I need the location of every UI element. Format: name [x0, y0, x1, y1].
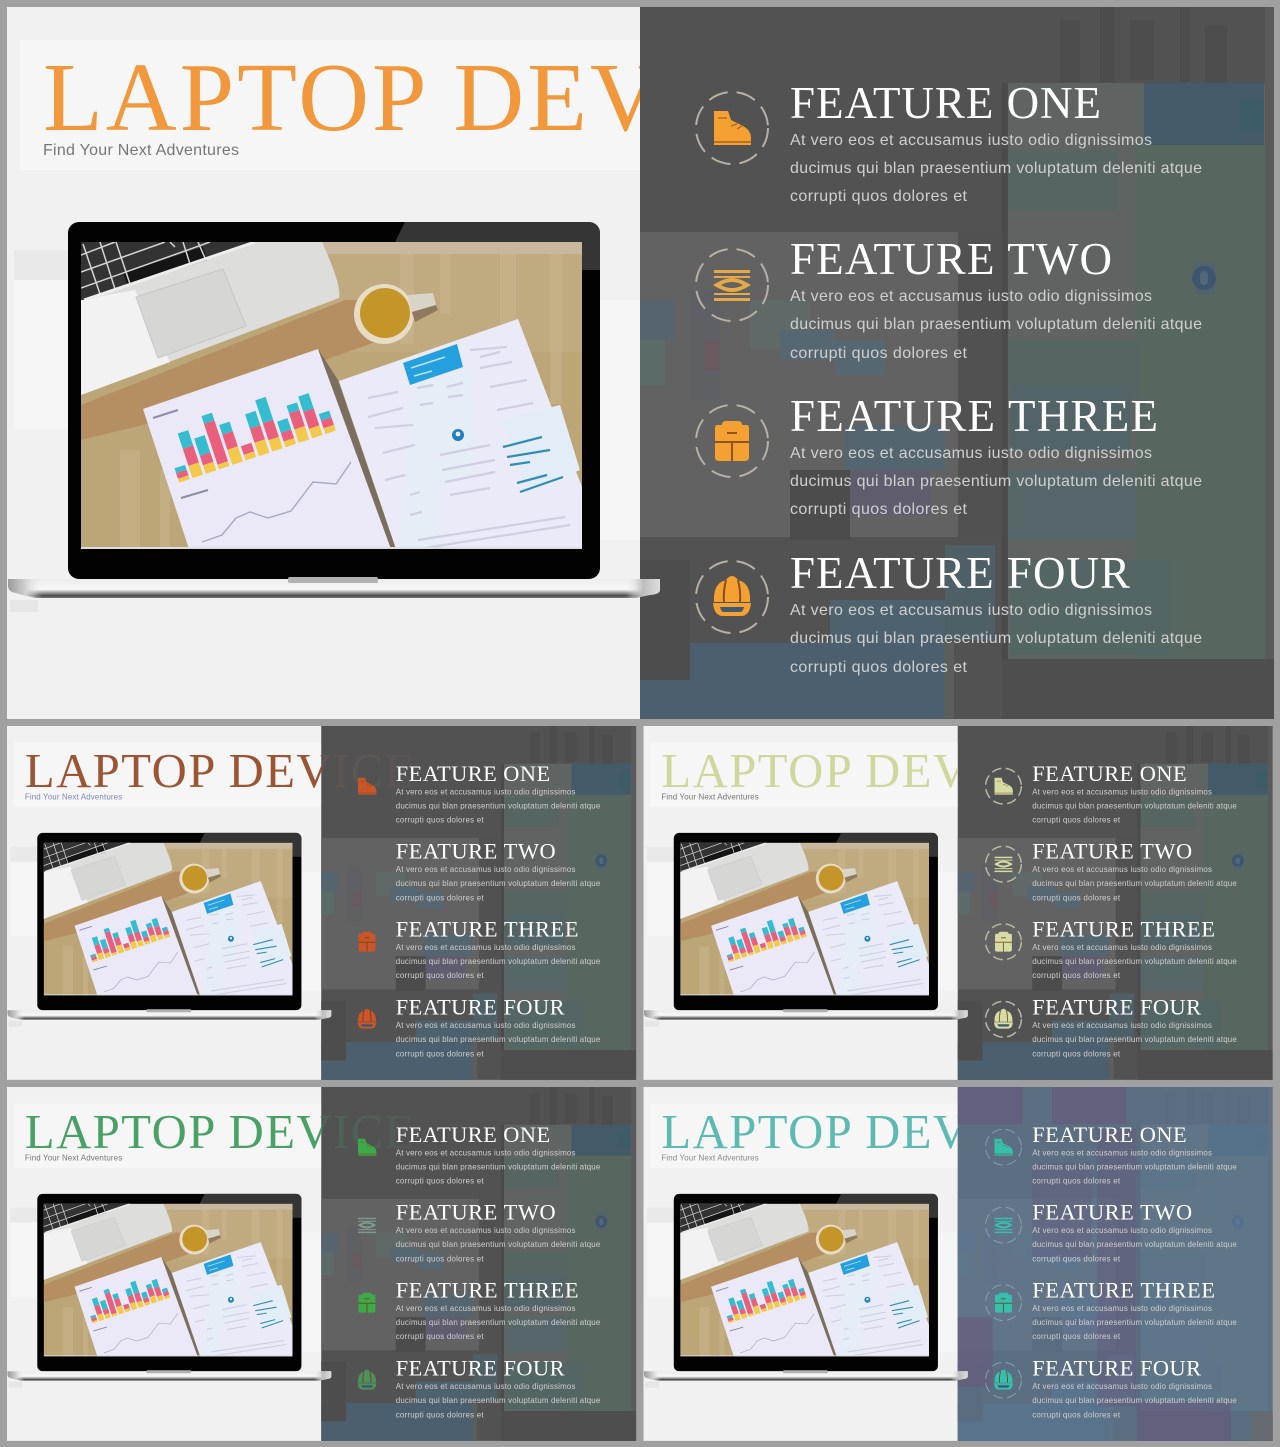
body text: At vero eos et accusamus iusto odio dignissimos [1032, 943, 1212, 952]
heading: FEATURE ONE [396, 761, 550, 786]
left background [644, 1087, 958, 1441]
body text [1032, 1382, 1237, 1420]
body text: corrupti quos dolores et [1032, 1050, 1121, 1059]
body text: ducimus qui blan praesentium voluptatum deleniti atque [1032, 801, 1237, 811]
body text: At vero eos et accusamus iusto odio dignissimos [1032, 1021, 1212, 1030]
body text: ducimus qui blan praesentium voluptatum deleniti atque [1032, 1162, 1237, 1172]
body text [396, 865, 601, 902]
body text: ducimus qui blan praesentium voluptatum deleniti atque [790, 630, 1202, 647]
icon: kayak [358, 1218, 376, 1233]
body text: At vero eos et accusamus iusto odio dignissimos [790, 288, 1152, 305]
body text: corrupti quos dolores et [396, 1332, 484, 1341]
body text: At vero eos et accusamus iusto odio dignissimos [1032, 1304, 1212, 1313]
title: LAPTOP DEVICE [25, 744, 416, 798]
feature one [358, 761, 601, 824]
feature two [986, 1200, 1237, 1263]
icon: boot [358, 778, 376, 795]
feature three [986, 1278, 1237, 1341]
body text: ducimus qui blan praesentium voluptatum deleniti atque [396, 1318, 601, 1327]
slide: teal variant [644, 1087, 1273, 1441]
body text [1032, 865, 1237, 902]
body text: corrupti quos dolores et [1032, 1176, 1121, 1185]
subtitle: Find Your Next Adventures [25, 1154, 122, 1163]
body text: corrupti quos dolores et [1032, 893, 1121, 902]
laptop mockup with desk photo [7, 1194, 331, 1381]
icon: helmet [358, 1370, 376, 1390]
body text: ducimus qui blan praesentium voluptatum deleniti atque [1032, 1035, 1237, 1044]
icon: kayak [986, 846, 1021, 882]
heading: FEATURE FOUR [1032, 1356, 1201, 1381]
body text: At vero eos et accusamus iusto odio dignissimos [396, 943, 576, 952]
feature three [359, 1278, 601, 1341]
heading: FEATURE THREE [396, 917, 578, 942]
laptop mockup with desk photo [644, 833, 968, 1020]
body text: corrupti quos dolores et [1032, 1332, 1121, 1341]
heading: FEATURE ONE [1032, 1122, 1187, 1147]
feature four [696, 548, 1202, 676]
icon: boot [696, 92, 768, 164]
body text: At vero eos et accusamus iusto odio dignissimos [1032, 788, 1212, 797]
body text: At vero eos et accusamus iusto odio dignissimos [1032, 865, 1212, 874]
body text: corrupti quos dolores et [790, 501, 968, 518]
left background [644, 726, 958, 1080]
heading: FEATURE TWO [396, 839, 556, 864]
left background [7, 7, 640, 719]
slide: lime variant [644, 726, 1273, 1080]
right dark photo panel [321, 1087, 636, 1441]
heading: FEATURE FOUR [396, 1356, 565, 1381]
body text [396, 1304, 601, 1341]
feature one [358, 1122, 601, 1185]
icon: backpack [696, 405, 768, 477]
heading: FEATURE FOUR [396, 995, 565, 1020]
body text: ducimus qui blan praesentium voluptatum deleniti atque [1032, 1396, 1237, 1405]
heading: FEATURE TWO [1032, 1200, 1192, 1225]
heading: FEATURE TWO [396, 1200, 556, 1225]
body text: At vero eos et accusamus iusto odio dignissimos [396, 1149, 576, 1158]
icon: helmet [986, 1001, 1021, 1037]
body text: corrupti quos dolores et [396, 1254, 484, 1263]
body text: At vero eos et accusamus iusto odio dignissimos [790, 132, 1152, 149]
body text: ducimus qui blan praesentium voluptatum deleniti atque [1032, 1318, 1237, 1327]
body text [396, 788, 601, 824]
laptop mockup with desk photo [8, 222, 660, 598]
title: LAPTOP DEVICE [661, 1105, 1052, 1159]
feature two [358, 1200, 601, 1263]
body text [396, 1021, 601, 1059]
body text: ducimus qui blan praesentium voluptatum deleniti atque [790, 160, 1202, 177]
body text: ducimus qui blan praesentium voluptatum deleniti atque [790, 316, 1202, 333]
body text [396, 1226, 601, 1263]
body text [396, 1382, 601, 1420]
body text [1032, 788, 1237, 824]
body text: corrupti quos dolores et [396, 1050, 484, 1059]
body text [1032, 1226, 1237, 1263]
left background [7, 1087, 321, 1441]
right dark photo panel [958, 1087, 1273, 1441]
feature one [986, 1122, 1237, 1185]
body text: At vero eos et accusamus iusto odio dignissimos [396, 1304, 576, 1313]
icon: boot [986, 1129, 1021, 1165]
body text: ducimus qui blan praesentium voluptatum deleniti atque [396, 1240, 601, 1249]
body text [790, 602, 1202, 676]
body text: ducimus qui blan praesentium voluptatum deleniti atque [396, 801, 601, 811]
title: LAPTOP DEVICE [43, 44, 831, 152]
blue tint over panel [958, 1087, 1273, 1441]
subtitle: Find Your Next Adventures [43, 142, 239, 159]
body text: corrupti quos dolores et [396, 1411, 484, 1420]
body text: corrupti quos dolores et [1032, 815, 1121, 824]
body text: corrupti quos dolores et [396, 815, 484, 824]
body text: ducimus qui blan praesentium voluptatum deleniti atque [396, 1396, 601, 1405]
body text: ducimus qui blan praesentium voluptatum deleniti atque [1032, 1240, 1237, 1249]
feature three [986, 917, 1237, 980]
icon: boot [358, 1139, 376, 1156]
feature three [696, 391, 1202, 518]
subtitle: Find Your Next Adventures [661, 1154, 759, 1163]
icon: backpack [986, 924, 1021, 960]
body text: ducimus qui blan praesentium voluptatum deleniti atque [396, 1035, 601, 1044]
body text: At vero eos et accusamus iusto odio dignissimos [790, 602, 1152, 619]
heading: FEATURE TWO [790, 234, 1112, 284]
body text: corrupti quos dolores et [1032, 1254, 1121, 1263]
body text [1032, 1149, 1237, 1185]
icon: backpack [986, 1285, 1021, 1321]
body text: corrupti quos dolores et [1032, 971, 1121, 980]
feature four [358, 995, 601, 1059]
subtitle: Find Your Next Adventures [661, 793, 759, 802]
body text: corrupti quos dolores et [790, 345, 968, 362]
feature three [359, 917, 601, 980]
subtitle: Find Your Next Adventures [25, 793, 122, 802]
heading: FEATURE ONE [790, 78, 1101, 128]
icon: backpack [359, 932, 375, 952]
body text: At vero eos et accusamus iusto odio dignissimos [396, 865, 576, 874]
heading: FEATURE ONE [1032, 761, 1187, 786]
body text: ducimus qui blan praesentium voluptatum deleniti atque [396, 957, 601, 966]
body text: ducimus qui blan praesentium voluptatum deleniti atque [396, 879, 601, 888]
icon: helmet [986, 1362, 1021, 1398]
body text: ducimus qui blan praesentium voluptatum deleniti atque [396, 1162, 601, 1172]
heading: FEATURE FOUR [1032, 995, 1201, 1020]
laptop mockup with desk photo [7, 833, 331, 1020]
right dark photo panel [958, 726, 1273, 1080]
feature one [986, 761, 1237, 824]
body text: At vero eos et accusamus iusto odio dignissimos [790, 445, 1152, 462]
icon: kayak [696, 249, 768, 321]
heading: FEATURE THREE [396, 1278, 578, 1303]
body text: At vero eos et accusamus iusto odio dignissimos [396, 1226, 576, 1235]
feature two [986, 839, 1237, 902]
right dark photo panel [640, 7, 1274, 719]
icon: kayak [986, 1207, 1021, 1243]
body text: At vero eos et accusamus iusto odio dignissimos [1032, 1226, 1212, 1235]
body text [790, 132, 1202, 205]
body text: ducimus qui blan praesentium voluptatum deleniti atque [1032, 879, 1237, 888]
body text: corrupti quos dolores et [790, 188, 968, 205]
feature four [986, 995, 1237, 1059]
icon: helmet [696, 561, 768, 633]
body text [396, 1149, 601, 1185]
title: LAPTOP DEVICE [661, 744, 1052, 798]
body text [790, 445, 1202, 518]
body text [396, 943, 601, 980]
slide: green variant [7, 1087, 636, 1441]
icon: backpack [359, 1293, 375, 1313]
body text: ducimus qui blan praesentium voluptatum deleniti atque [1032, 957, 1237, 966]
body text: At vero eos et accusamus iusto odio dignissimos [1032, 1149, 1212, 1158]
feature one [696, 78, 1202, 205]
heading: FEATURE FOUR [790, 548, 1130, 598]
laptop mockup with desk photo [644, 1194, 968, 1381]
heading: FEATURE TWO [1032, 839, 1192, 864]
body text: corrupti quos dolores et [1032, 1411, 1121, 1420]
title: LAPTOP DEVICE [25, 1105, 416, 1159]
body text [1032, 1304, 1237, 1341]
right dark photo panel [321, 726, 636, 1080]
feature two [396, 839, 601, 902]
body text: At vero eos et accusamus iusto odio dignissimos [396, 1382, 576, 1391]
body text: ducimus qui blan praesentium voluptatum deleniti atque [790, 473, 1202, 490]
heading: FEATURE ONE [396, 1122, 550, 1147]
slide: orange (main) [7, 7, 1274, 719]
feature four [986, 1356, 1237, 1420]
body text [790, 288, 1202, 362]
feature four [358, 1356, 601, 1420]
body text: corrupti quos dolores et [396, 893, 484, 902]
body text: corrupti quos dolores et [396, 971, 484, 980]
body text [1032, 943, 1237, 980]
heading: FEATURE THREE [1032, 917, 1215, 942]
body text [1032, 1021, 1237, 1059]
icon: boot [986, 768, 1021, 804]
heading: FEATURE THREE [790, 391, 1158, 441]
body text: corrupti quos dolores et [396, 1176, 484, 1185]
left background [7, 726, 321, 1080]
slide: red variant [7, 726, 636, 1080]
body text: At vero eos et accusamus iusto odio dignissimos [396, 1021, 576, 1030]
icon: helmet [358, 1009, 376, 1029]
feature two [696, 234, 1202, 362]
body text: At vero eos et accusamus iusto odio dignissimos [396, 788, 576, 797]
heading: FEATURE THREE [1032, 1278, 1215, 1303]
body text: At vero eos et accusamus iusto odio dignissimos [1032, 1382, 1212, 1391]
body text: corrupti quos dolores et [790, 659, 968, 676]
